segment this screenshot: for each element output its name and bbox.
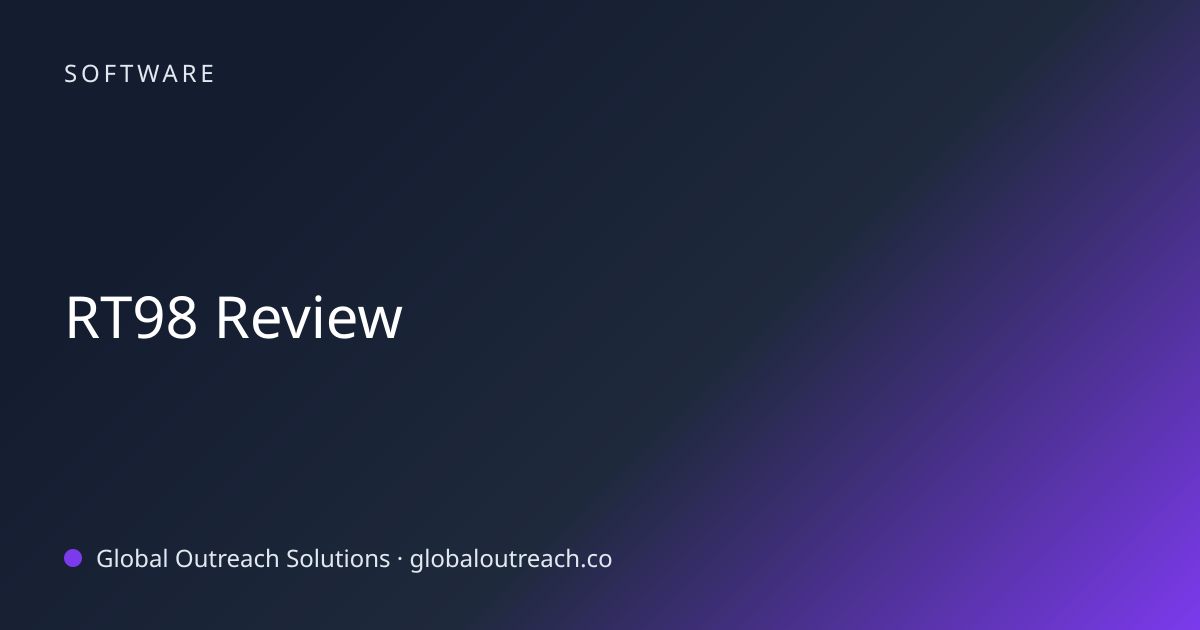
brand text: Global Outreach Solutions · globaloutreach.co bbox=[96, 542, 613, 575]
icon: brand dot bbox=[64, 549, 82, 567]
footer: brand and domain bbox=[64, 542, 613, 575]
title: RT98 Review bbox=[64, 276, 403, 355]
category label: SOFTWARE bbox=[64, 57, 218, 90]
